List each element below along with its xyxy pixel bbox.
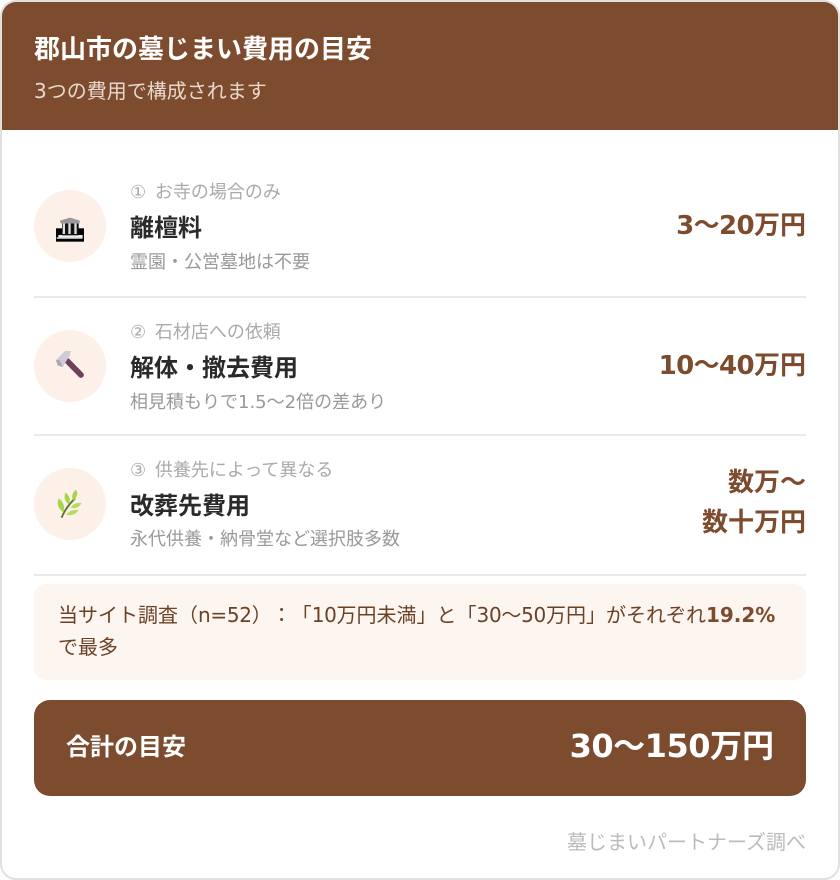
title: 郡山市の墓じまい費用の目安 bbox=[34, 35, 372, 65]
row 1 detail: 霊園・公営墓地は不要 bbox=[130, 252, 310, 273]
row 3 detail: 永代供養・納骨堂など選択肢多数 bbox=[130, 529, 400, 550]
row 2 detail: 相見積もりで1.5～2倍の差あり bbox=[130, 392, 386, 413]
row 3 note: ③ 供養先によって異なる bbox=[130, 460, 333, 481]
source credit: 墓じまいパートナーズ調べ bbox=[567, 830, 806, 854]
row 2 name: 解体・撤去費用 bbox=[130, 354, 298, 382]
total amount: 30～150万円 bbox=[570, 727, 774, 765]
row 1 note: ① お寺の場合のみ bbox=[130, 182, 281, 203]
icon: temple bbox=[34, 190, 106, 262]
row 1 price: 3～20万円 bbox=[676, 211, 806, 241]
icon: herb bbox=[34, 468, 106, 540]
row 2: 解体・撤去費用 bbox=[34, 322, 806, 413]
row 2 price: 10～40万円 bbox=[659, 351, 806, 381]
row 1 name: 離檀料 bbox=[130, 214, 202, 242]
row 2 note: ② 石材店への依頼 bbox=[130, 322, 281, 343]
row 3 price: 数万～ bbox=[728, 468, 806, 498]
total bar bbox=[34, 700, 806, 796]
row 3 price: 数十万円 bbox=[702, 508, 806, 538]
survey note: 当サイト調査（n=52）：「10万円未満」と「30～50万円」がそれぞれ19.2% で最多 bbox=[58, 603, 775, 659]
subtitle: 3つの費用で構成されます bbox=[34, 79, 267, 103]
header panel bbox=[2, 2, 838, 130]
row 1: 離檀料 bbox=[34, 182, 806, 273]
row 3 price bbox=[702, 468, 806, 538]
total label: 合計の目安 bbox=[66, 733, 186, 761]
row 3 name: 改葬先費用 bbox=[130, 492, 250, 520]
icon: hammer bbox=[34, 330, 106, 402]
survey note bbox=[34, 584, 806, 680]
row 3: 改葬先費用 bbox=[34, 460, 806, 550]
